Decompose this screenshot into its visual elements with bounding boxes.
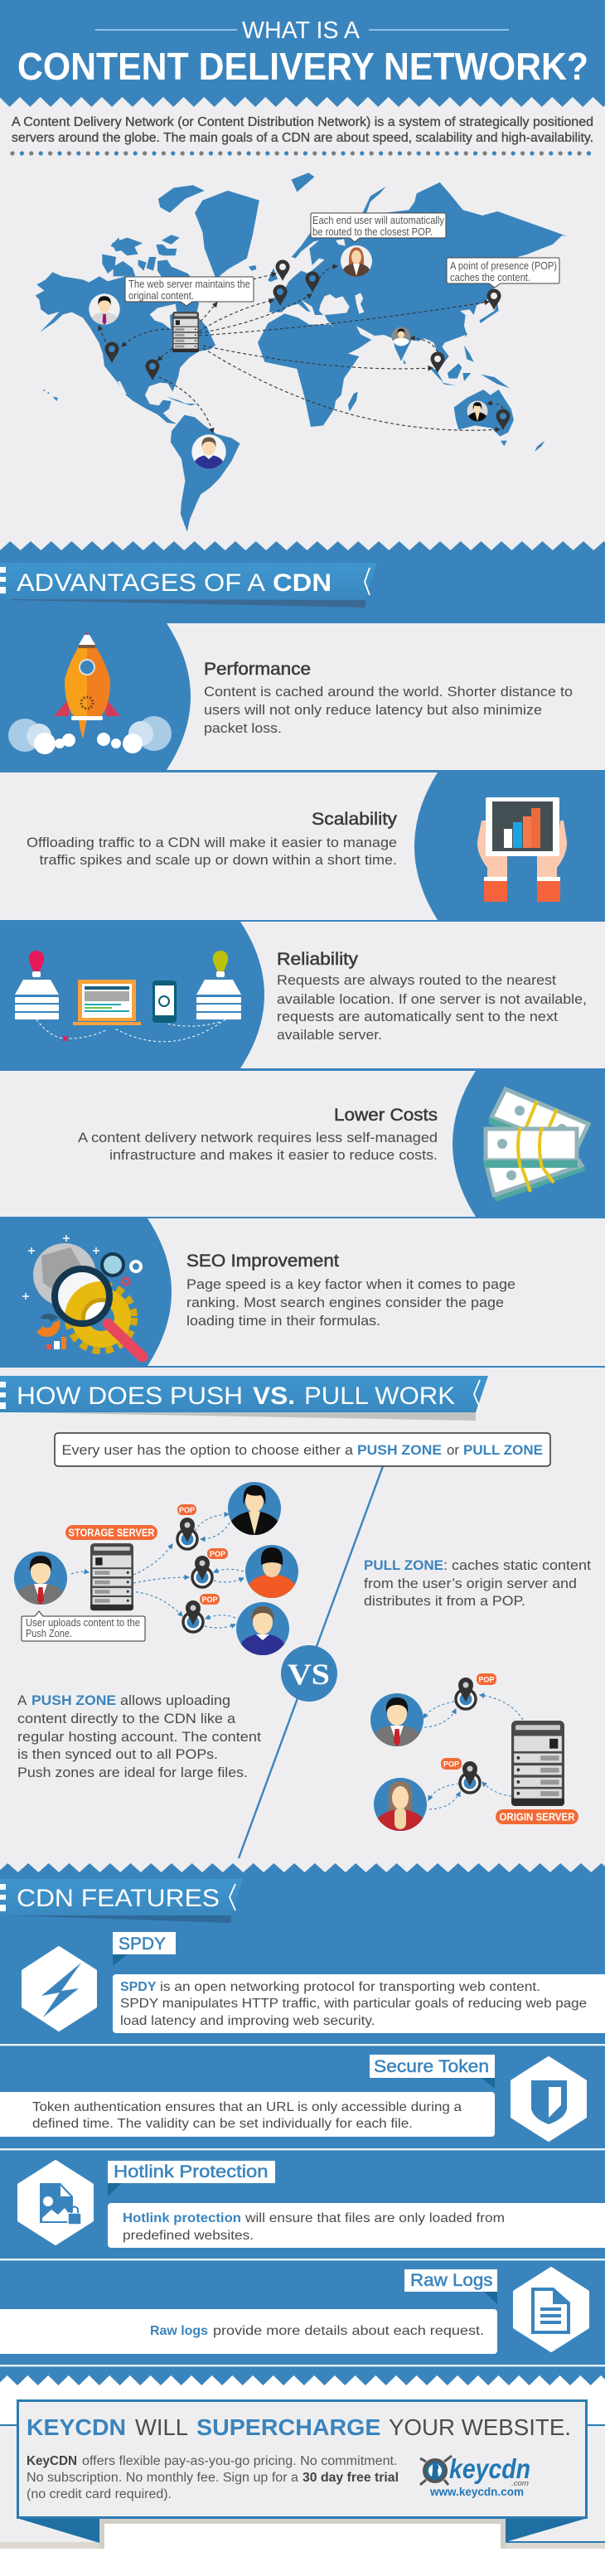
KeyCDN logo: keycdn xyxy=(449,2453,530,2484)
panel: reliability: requests are automatically sent to the next xyxy=(277,1009,558,1024)
headline: YOUR WEBSITE. xyxy=(389,2414,571,2440)
heading: how does push vs pull work: PULL WORK xyxy=(304,1382,455,1410)
POP pins: POP xyxy=(179,1506,195,1514)
icon: money bundles xyxy=(484,1089,588,1202)
feature: SPDY: load latency and improving web security. xyxy=(120,2014,375,2028)
pull POP pins xyxy=(441,1673,496,1793)
headline: SUPERCHARGE xyxy=(196,2414,381,2440)
panel: reliability: Requests are always routed to the nearest xyxy=(277,972,556,988)
panel: reliability: Reliability xyxy=(277,950,359,969)
headline: WILL xyxy=(135,2414,188,2440)
icon: shield hexagon xyxy=(512,2058,585,2140)
text: push zone: PUSH ZONE xyxy=(31,1692,116,1708)
panel: lower costs xyxy=(0,1068,605,1217)
dotted divider xyxy=(10,151,595,156)
offer text xyxy=(27,2454,399,2501)
feature: secure token xyxy=(0,2055,585,2140)
storage server xyxy=(90,1543,133,1610)
map pins xyxy=(104,260,511,430)
panel: lower costs: A content delivery network requires less self-managed xyxy=(78,1130,438,1145)
heading: CDN features: CDN FEATURES xyxy=(17,1885,220,1912)
panel: SEO improvement: ranking. Most search engines consider the page xyxy=(186,1295,504,1310)
user uploader xyxy=(14,1552,67,1605)
option box: Every user has the option to choose either a xyxy=(61,1442,354,1458)
pull users xyxy=(370,1693,427,1832)
panel: SEO improvement xyxy=(0,1217,605,1368)
intro text: A Content Delivery Network (or Content Distribution Network) is a system of strategically positioned xyxy=(12,115,593,129)
Greenland xyxy=(195,191,259,279)
text: push zone: regular hosting account. The content xyxy=(17,1729,261,1745)
heading: how does push vs pull work: VS. xyxy=(253,1382,295,1410)
offer text: (no credit card required). xyxy=(27,2487,172,2501)
panel: performance: packet loss. xyxy=(204,720,282,736)
storage server label: STORAGE SERVER xyxy=(68,1527,155,1538)
end users xyxy=(228,1482,298,1656)
callout: end user xyxy=(311,213,446,242)
panel: SEO improvement: loading time in their formulas. xyxy=(186,1313,380,1329)
feature: raw logs: provide more details about each request. xyxy=(213,2324,484,2338)
panel: scalability: traffic spikes and scale up or down within a short time. xyxy=(40,852,397,868)
icon: globe, magnifier and gear xyxy=(22,1235,143,1357)
callout: POP xyxy=(447,258,559,288)
panel: reliability xyxy=(0,920,605,1068)
offer text: KeyCDN xyxy=(27,2454,77,2468)
feature: SPDY: SPDY xyxy=(119,1934,166,1954)
option box xyxy=(55,1433,550,1466)
feature: hotlink protection: will ensure that files are only loaded from xyxy=(244,2211,505,2225)
map network dashed routes xyxy=(99,266,503,433)
feature: hotlink protection xyxy=(19,2161,605,2248)
callout: POP: caches the content. xyxy=(450,272,530,283)
panel: reliability: available server. xyxy=(277,1027,382,1043)
icon: image file with lock xyxy=(19,2162,92,2244)
text: push zone: Push zones are ideal for large files. xyxy=(17,1765,248,1780)
advantages background band xyxy=(0,541,605,623)
callout: POP: A point of presence (POP) xyxy=(450,260,557,272)
Eurasia xyxy=(269,182,567,363)
callout: web server: original content. xyxy=(128,290,194,302)
panel: performance xyxy=(0,623,605,770)
callout: web server: The web server maintains the xyxy=(128,278,250,290)
feature: hotlink protection: predefined websites. xyxy=(123,2229,254,2243)
divider line xyxy=(239,1466,383,1858)
panel: lower costs: infrastructure and makes it easier to reduce costs. xyxy=(109,1147,438,1163)
panel: scalability xyxy=(0,770,605,920)
map web server xyxy=(172,312,199,352)
panel: lower costs: Lower Costs xyxy=(334,1106,438,1125)
feature: raw logs: Raw logs xyxy=(150,2324,208,2338)
feature: hotlink protection: Hotlink Protection xyxy=(114,2162,269,2181)
diagram: push zone xyxy=(14,1482,298,1656)
option box: or xyxy=(447,1442,459,1458)
text: push zone: A xyxy=(17,1692,27,1708)
origin server label: ORIGIN SERVER xyxy=(499,1810,575,1823)
POP pins: POP xyxy=(201,1595,218,1604)
feature: SPDY: SPDY xyxy=(120,1980,157,1994)
heading: how does push vs pull work: HOW DOES PUSH xyxy=(17,1382,243,1410)
push arrows xyxy=(71,1514,244,1628)
intro text: servers around the globe. The main goals of a CDN are about speed, scalability and high-availability. xyxy=(12,131,593,145)
callout: end user: be routed to the closest POP. xyxy=(312,226,433,238)
title: WHAT IS A xyxy=(242,17,361,44)
VS badge xyxy=(281,1645,337,1702)
North America xyxy=(36,272,215,424)
pull arrows xyxy=(424,1695,523,1809)
feature: hotlink protection: Hotlink protection xyxy=(123,2211,241,2225)
icon: servers and devices xyxy=(15,951,241,1042)
text: push zone: content directly to the CDN like a xyxy=(17,1711,236,1726)
text: pull zone xyxy=(364,1557,591,1609)
POP pins xyxy=(177,1504,228,1632)
feature: secure token: Token authentication ensures that an URL is only accessible during a xyxy=(32,2100,462,2114)
heading: how does push vs pull work xyxy=(0,1376,488,1421)
icon: lightning hexagon xyxy=(23,1948,95,2030)
title xyxy=(17,17,588,88)
feature: secure token: Secure Token xyxy=(374,2057,489,2076)
feature: raw logs: Raw Logs xyxy=(410,2271,492,2290)
callout: user uploads xyxy=(22,1611,145,1641)
feature: raw logs xyxy=(0,2269,588,2354)
icon: rocket xyxy=(8,632,172,754)
panel: reliability: available location. If one server is not available, xyxy=(277,991,587,1007)
text: pull zone: : caches static content xyxy=(443,1557,591,1573)
callout: end user: Each end user will automatically xyxy=(312,215,445,226)
feature: SPDY xyxy=(23,1932,605,2033)
text: push zone: allows uploading xyxy=(120,1692,230,1708)
text: pull zone: PULL ZONE xyxy=(364,1557,443,1573)
headline xyxy=(27,2414,571,2440)
intro text xyxy=(12,115,593,145)
footer background xyxy=(0,2375,605,2576)
POP pins: POP xyxy=(210,1550,225,1558)
feature: secure token: defined time. The validity can be set individually for each file. xyxy=(32,2117,413,2131)
text: pull zone: distributes it from a POP. xyxy=(364,1593,525,1609)
callout: web server xyxy=(125,277,254,306)
world map xyxy=(36,172,567,532)
panel: performance: users will not only reduce latency but also minimize xyxy=(204,702,542,718)
icon: tablet with bar chart xyxy=(477,797,567,902)
headline: KEYCDN xyxy=(27,2414,126,2440)
offer text: 30 day free trial xyxy=(302,2471,399,2485)
heading: advantages of a CDN: ADVANTAGES OF A xyxy=(17,569,265,597)
origin server xyxy=(511,1721,564,1806)
heading: advantages of a CDN xyxy=(0,563,377,608)
panel: performance: Performance xyxy=(204,660,311,679)
KeyCDN logo: .com xyxy=(511,2479,530,2487)
heading: CDN features xyxy=(0,1879,243,1923)
ribbon folds xyxy=(17,2518,588,2543)
diagram: pull zone xyxy=(370,1673,578,1832)
text: push zone xyxy=(17,1692,261,1780)
features background xyxy=(0,1863,605,2375)
header band xyxy=(0,0,605,107)
feature: SPDY: SPDY manipulates HTTP traffic, with particular goals of reducing web page xyxy=(120,1997,587,2011)
panel: scalability: Offloading traffic to a CDN will make it easier to manage xyxy=(27,835,397,850)
pull POP pins: POP xyxy=(443,1760,459,1769)
KeyCDN logo xyxy=(420,2453,530,2498)
panel: scalability: Scalability xyxy=(312,810,398,829)
VS badge: VS xyxy=(288,1658,330,1691)
text: pull zone: from the user’s origin server and xyxy=(364,1576,577,1591)
callout: user uploads: Push Zone. xyxy=(26,1628,72,1639)
offer text: offers flexible pay-as-you-go pricing. No commitment. xyxy=(82,2454,398,2468)
panel: SEO improvement: Page speed is a key factor when it comes to page xyxy=(186,1276,515,1292)
icon: document hexagon xyxy=(515,2269,588,2351)
panel: SEO improvement: SEO Improvement xyxy=(186,1252,339,1271)
offer text: No subscription. No monthly fee. Sign up for a xyxy=(27,2471,298,2485)
panel: call to action xyxy=(18,2400,587,2518)
option box: PULL ZONE xyxy=(463,1442,543,1458)
option box: PUSH ZONE xyxy=(357,1442,442,1458)
callout: user uploads: User uploads content to the xyxy=(26,1617,140,1629)
heading: advantages of a CDN: CDN xyxy=(273,569,332,597)
panel: performance: Content is cached around the world. Shorter distance to xyxy=(204,684,573,700)
text: push zone: is then synced out to all POPs. xyxy=(17,1746,218,1762)
pull POP pins: POP xyxy=(478,1676,495,1684)
feature: SPDY: is an open networking protocol for transporting web content. xyxy=(160,1980,540,1994)
Africa xyxy=(258,313,359,427)
KeyCDN logo: www.keycdn.com xyxy=(429,2485,524,2498)
map users xyxy=(89,245,487,469)
Australia xyxy=(454,390,514,437)
